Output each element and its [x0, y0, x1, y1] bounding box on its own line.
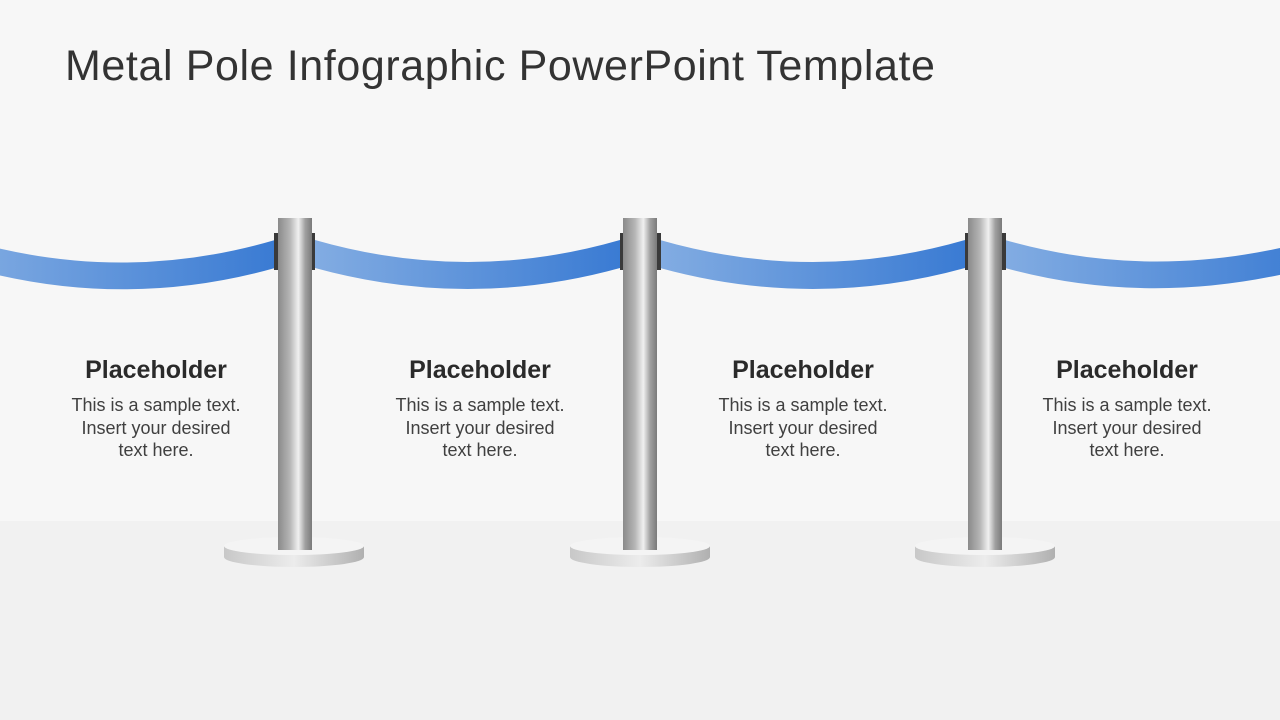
- text block 3: Placeholder: [732, 356, 874, 384]
- text block 1: Insert your desired: [81, 418, 231, 438]
- pole 1: [224, 218, 364, 567]
- pole 2: [570, 218, 710, 567]
- text block 2: This is a sample text.: [395, 395, 565, 415]
- text block 3: [718, 356, 888, 460]
- title: Metal Pole Infographic PowerPoint Template: [65, 42, 936, 90]
- text block 3: Insert your desired: [728, 418, 878, 438]
- text block 4: text here.: [1089, 440, 1165, 460]
- text block 4: [1042, 356, 1212, 460]
- text block 3: text here.: [765, 440, 841, 460]
- text block 4: Insert your desired: [1052, 418, 1202, 438]
- text block 2: Placeholder: [409, 356, 551, 384]
- text block 2: text here.: [442, 440, 518, 460]
- ribbon: [0, 238, 1280, 289]
- text block 1: This is a sample text.: [71, 395, 241, 415]
- pole 3: [915, 218, 1055, 567]
- text block 2: Insert your desired: [405, 418, 555, 438]
- text block 3: This is a sample text.: [718, 395, 888, 415]
- text block 2: [395, 356, 565, 460]
- text block 4: This is a sample text.: [1042, 395, 1212, 415]
- text block 4: Placeholder: [1056, 356, 1198, 384]
- text block 1: [71, 356, 241, 460]
- text block 1: text here.: [118, 440, 194, 460]
- text block 1: Placeholder: [85, 356, 227, 384]
